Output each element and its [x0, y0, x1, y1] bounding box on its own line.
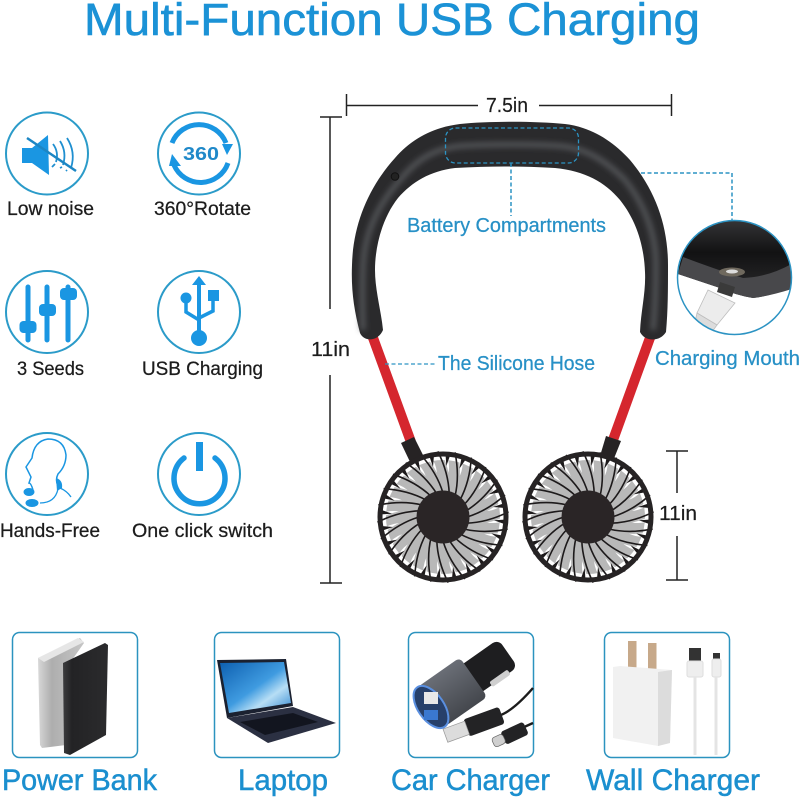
icon: power button	[158, 433, 240, 515]
icon: usb symbol	[158, 271, 240, 353]
icon: head with headset	[6, 433, 88, 515]
silicone hose: right	[613, 335, 651, 440]
width dimension: 7.5in	[346, 94, 672, 117]
fan: right	[522, 436, 654, 583]
label: one click switch: One click switch	[132, 521, 273, 542]
icon: car charger with cables	[406, 633, 533, 749]
label: car charger: Car Charger	[391, 764, 550, 797]
silicone hose: left	[372, 335, 411, 442]
height dimension: 11in: 11in	[311, 339, 350, 361]
feature: one click switch	[132, 433, 273, 542]
feature: low noise	[6, 112, 94, 220]
fan height dimension: 11in	[659, 451, 697, 580]
label: 360 rotate: 360°Rotate	[154, 199, 251, 220]
charging mouth callout	[641, 173, 800, 370]
label: wall charger: Wall Charger	[586, 764, 760, 797]
panel: wall charger	[586, 632, 760, 797]
label: power bank: Power Bank	[2, 764, 158, 797]
neck band	[352, 122, 668, 340]
icon: wall charger and cable	[613, 641, 721, 755]
feature: 360 rotate	[154, 112, 251, 220]
feature: usb charging	[142, 271, 263, 380]
battery compartments callout	[407, 128, 606, 237]
label: laptop: Laptop	[238, 764, 328, 797]
label: usb charging: USB Charging	[142, 359, 263, 380]
height dimension: 11in	[311, 117, 350, 583]
label: charging mouth: Charging Mouth	[655, 348, 800, 370]
icon: laptop	[217, 659, 336, 743]
width dimension: 7.5in: 7.5in	[486, 95, 528, 117]
icon: muted speaker	[6, 112, 88, 194]
battery compartments callout: Battery Compartments	[407, 215, 606, 237]
panel: laptop	[214, 632, 340, 797]
label: 3 seeds: 3 Seeds	[17, 359, 84, 380]
silicone hose callout: The Silicone Hose	[438, 353, 595, 375]
icon: 360 rotation arrows: 360	[183, 144, 219, 164]
label: hands-free: Hands-Free	[0, 521, 100, 542]
inset: charging port close-up	[676, 220, 792, 336]
feature: hands-free	[0, 433, 100, 542]
fan: left	[377, 437, 509, 583]
icon: power banks	[38, 638, 108, 755]
panel: car charger	[391, 632, 550, 797]
label: low noise: Low noise	[7, 199, 94, 220]
icon: sliders	[6, 271, 88, 353]
feature: 3 speeds	[6, 271, 88, 380]
panel: power bank	[2, 632, 158, 797]
fan height dimension: 11in: 11in	[659, 503, 697, 525]
